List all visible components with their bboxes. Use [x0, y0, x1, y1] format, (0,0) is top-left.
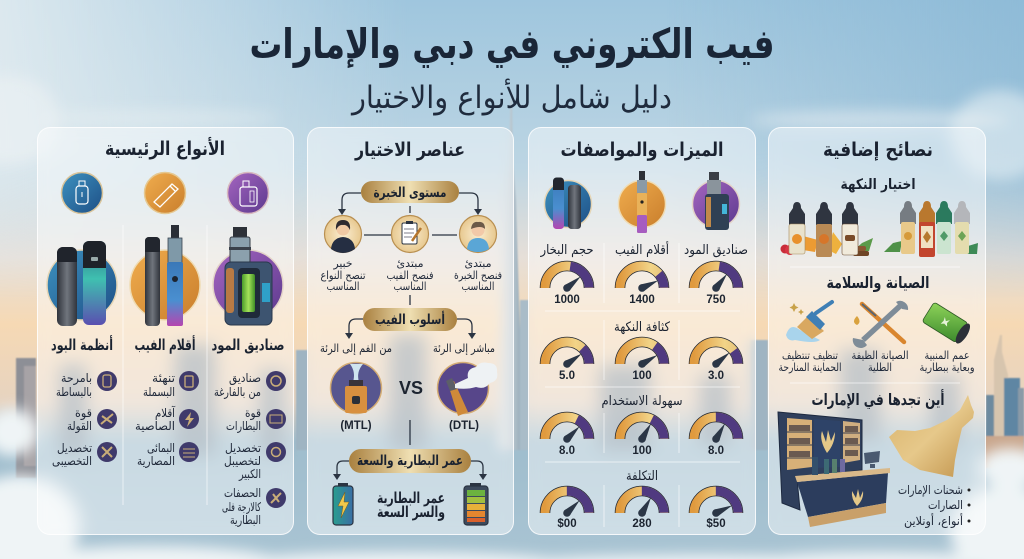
bullets: mod: البطارية	[230, 512, 260, 528]
label: battery text: والسر السعة	[376, 502, 444, 520]
bullet list: where to buy	[898, 482, 970, 528]
labels: experience: المناسب	[461, 280, 494, 292]
gauge row: cost: $00	[557, 518, 576, 530]
panel: selection factors	[307, 127, 514, 535]
arrows: battery	[332, 460, 486, 480]
labels: experience: خبير	[332, 256, 352, 270]
bullets: mod: من بالفارغة	[214, 384, 260, 400]
heading: flavor density: كثافة النكهة	[614, 320, 670, 334]
heading: cost: التكلفة	[626, 468, 658, 484]
pen devices	[130, 224, 200, 326]
labels: device names: صناديق المود	[211, 336, 284, 354]
label: MTL code: (MTL)	[340, 420, 371, 432]
bullets: mod: البطارات	[226, 418, 260, 434]
bullets: mod: الحصفات	[224, 486, 260, 500]
bullets: pod: بامرحة	[60, 370, 92, 386]
gauge row: vapor size: 750	[706, 294, 725, 306]
pill: battery life	[348, 448, 470, 472]
gauge row: cost	[544, 490, 738, 530]
icon: battery	[921, 302, 972, 345]
panel: main types	[37, 127, 294, 535]
label: VS: VS	[398, 378, 423, 398]
gauge row: vapor size: 1000	[554, 294, 579, 306]
labels: experience: المناسب	[326, 280, 359, 292]
label: battery text: عمر البطارية	[376, 488, 444, 506]
gauge row: flavor density: 100	[632, 370, 651, 382]
device: pen	[618, 170, 665, 232]
labels: products: حجم البخار	[539, 242, 593, 258]
gauge row: cost: $50	[706, 518, 725, 530]
bullet list: where to buy: الصارات	[928, 498, 962, 512]
icon: MTL device	[330, 362, 381, 413]
bullets: pod	[52, 370, 116, 468]
gauge row: flavor density: 3.0	[708, 370, 724, 382]
panel: additional tips	[768, 127, 986, 535]
device: mod	[692, 172, 739, 230]
subheading: maintenance and safety: الصيانة والسلامة	[826, 272, 929, 292]
bullets: pod: تخصديل	[56, 440, 92, 454]
pill: battery life: عمر البطارية والسعة	[356, 452, 462, 468]
bullets: pod: القولة	[66, 418, 92, 434]
arrows: experience	[338, 192, 482, 304]
bullets: mod: تخصديل	[224, 440, 260, 454]
gauge row: vapor size	[544, 266, 738, 306]
heading: where to find: أين تجدها في الإمارات	[811, 388, 944, 410]
avatar: expert	[324, 215, 361, 252]
labels: maintenance: تنظيف تنتظيف	[782, 348, 838, 362]
heading: main types: الأنواع الرئيسية	[104, 136, 224, 160]
gauge row: ease of use: 8.0	[708, 444, 724, 456]
avatar: beginner	[459, 215, 496, 252]
labels: device names: أنظمة البود	[50, 334, 112, 354]
bullets: mod: قوة	[244, 406, 260, 420]
mod device	[212, 226, 282, 324]
gauge row: cost: 280	[632, 518, 651, 530]
bullets: mod: كالارجة فلى	[222, 500, 261, 514]
labels: maintenance: الحماينة المنارحة	[778, 360, 841, 374]
bullets: pen	[134, 370, 198, 468]
bullets: mod: لتخصيبل	[224, 454, 260, 468]
gauge row: ease of use: 8.0	[558, 444, 574, 456]
labels: maintenance: عمم المنبية	[924, 348, 969, 362]
icon: lightning battery	[332, 482, 352, 524]
bullets: mod: صناديق	[228, 370, 260, 386]
labels: products: أقلام الفيب	[614, 240, 668, 258]
pill: vape style: أسلوب الفيب	[374, 310, 444, 328]
labels: products	[539, 240, 748, 258]
label: battery text	[376, 488, 444, 520]
gauge row: flavor density	[544, 342, 738, 382]
labels: experience: المناسب	[393, 280, 426, 292]
bullets: pen: الصاصية	[134, 418, 174, 432]
label: MTL: من الفم إلى الرئة	[320, 340, 392, 356]
labels: device names	[50, 334, 284, 354]
bottles: tobacco and mint	[884, 200, 978, 256]
pod devices	[46, 240, 116, 326]
bullets: pen: البسملة	[142, 384, 174, 398]
icon: brush	[786, 302, 832, 342]
device: pod	[544, 177, 591, 228]
labels: experience	[320, 256, 502, 292]
heading: features and specs: الميزات والمواصفات	[560, 138, 723, 160]
labels: experience: مبتدئ	[464, 256, 491, 270]
label: DTL code: (DTL)	[448, 420, 479, 432]
labels: experience: تنصح النواع	[320, 268, 365, 282]
bottles: fruit and dessert	[780, 202, 872, 256]
pill: experience level: مستوى الخبرة	[373, 184, 446, 200]
labels: products: صناديق المود	[684, 242, 748, 258]
labels: maintenance: وبعاية ببطارية	[919, 360, 974, 374]
labels: maintenance: الصيانة الظيفة	[851, 348, 908, 362]
panel: features and specs	[528, 127, 756, 535]
icon: level battery	[464, 482, 488, 524]
icon: pen	[144, 172, 185, 213]
gauge row: vapor size: 1400	[629, 294, 654, 306]
avatar: checklist	[391, 215, 428, 252]
bullets: pod: قوة	[74, 406, 92, 420]
bullets: mod: الكبير	[238, 466, 260, 482]
labels: device names: أقلام الفيب	[134, 334, 195, 354]
bullets: pod: التخصيبى	[52, 454, 92, 468]
pill: experience level	[360, 180, 458, 202]
label: DTL: مباشر إلى الرئة	[432, 340, 494, 356]
icon: mod	[227, 172, 268, 213]
labels: experience: فنصح الخبرة	[454, 268, 502, 282]
gauge row: ease of use: 100	[632, 444, 651, 456]
labels: experience: فنصح الفيب	[386, 268, 433, 282]
map: UAE	[888, 394, 974, 476]
pill: vape style	[362, 308, 456, 330]
subheading: flavor choice: اختيار النكهة	[840, 176, 915, 192]
bullet list: where to buy: أنواع، أونلاين	[904, 512, 962, 528]
bullet list: where to buy: شحنات الإمارات	[898, 482, 962, 498]
bullets: pen: البمائى	[146, 440, 174, 454]
bullets: pen: تنهئة	[152, 370, 174, 384]
gauge row: ease of use	[544, 416, 738, 456]
icon: wrench and screwdriver	[852, 300, 908, 348]
labels: maintenance: الطلية	[868, 360, 892, 374]
arrows: vape style	[344, 318, 476, 338]
bullets: mod	[214, 370, 286, 528]
labels: maintenance	[778, 348, 974, 374]
bullets: pod: بالبساطة	[56, 384, 92, 398]
labels: experience: مبتدئ	[396, 256, 423, 270]
bullets: pen: آقلام	[154, 404, 175, 420]
icon: pod	[61, 172, 102, 213]
gauge row: flavor density: 5.0	[558, 370, 574, 382]
icon: DTL device	[437, 362, 497, 416]
heading: selection factors: عناصر الاختيار	[354, 138, 464, 160]
heading: additional tips: نصائح إضافية	[822, 138, 932, 160]
heading: ease of use: سهولة الاستخدام	[601, 394, 682, 408]
bullets: pen: المصارية	[136, 454, 174, 468]
illustration: vape shop	[778, 412, 890, 526]
